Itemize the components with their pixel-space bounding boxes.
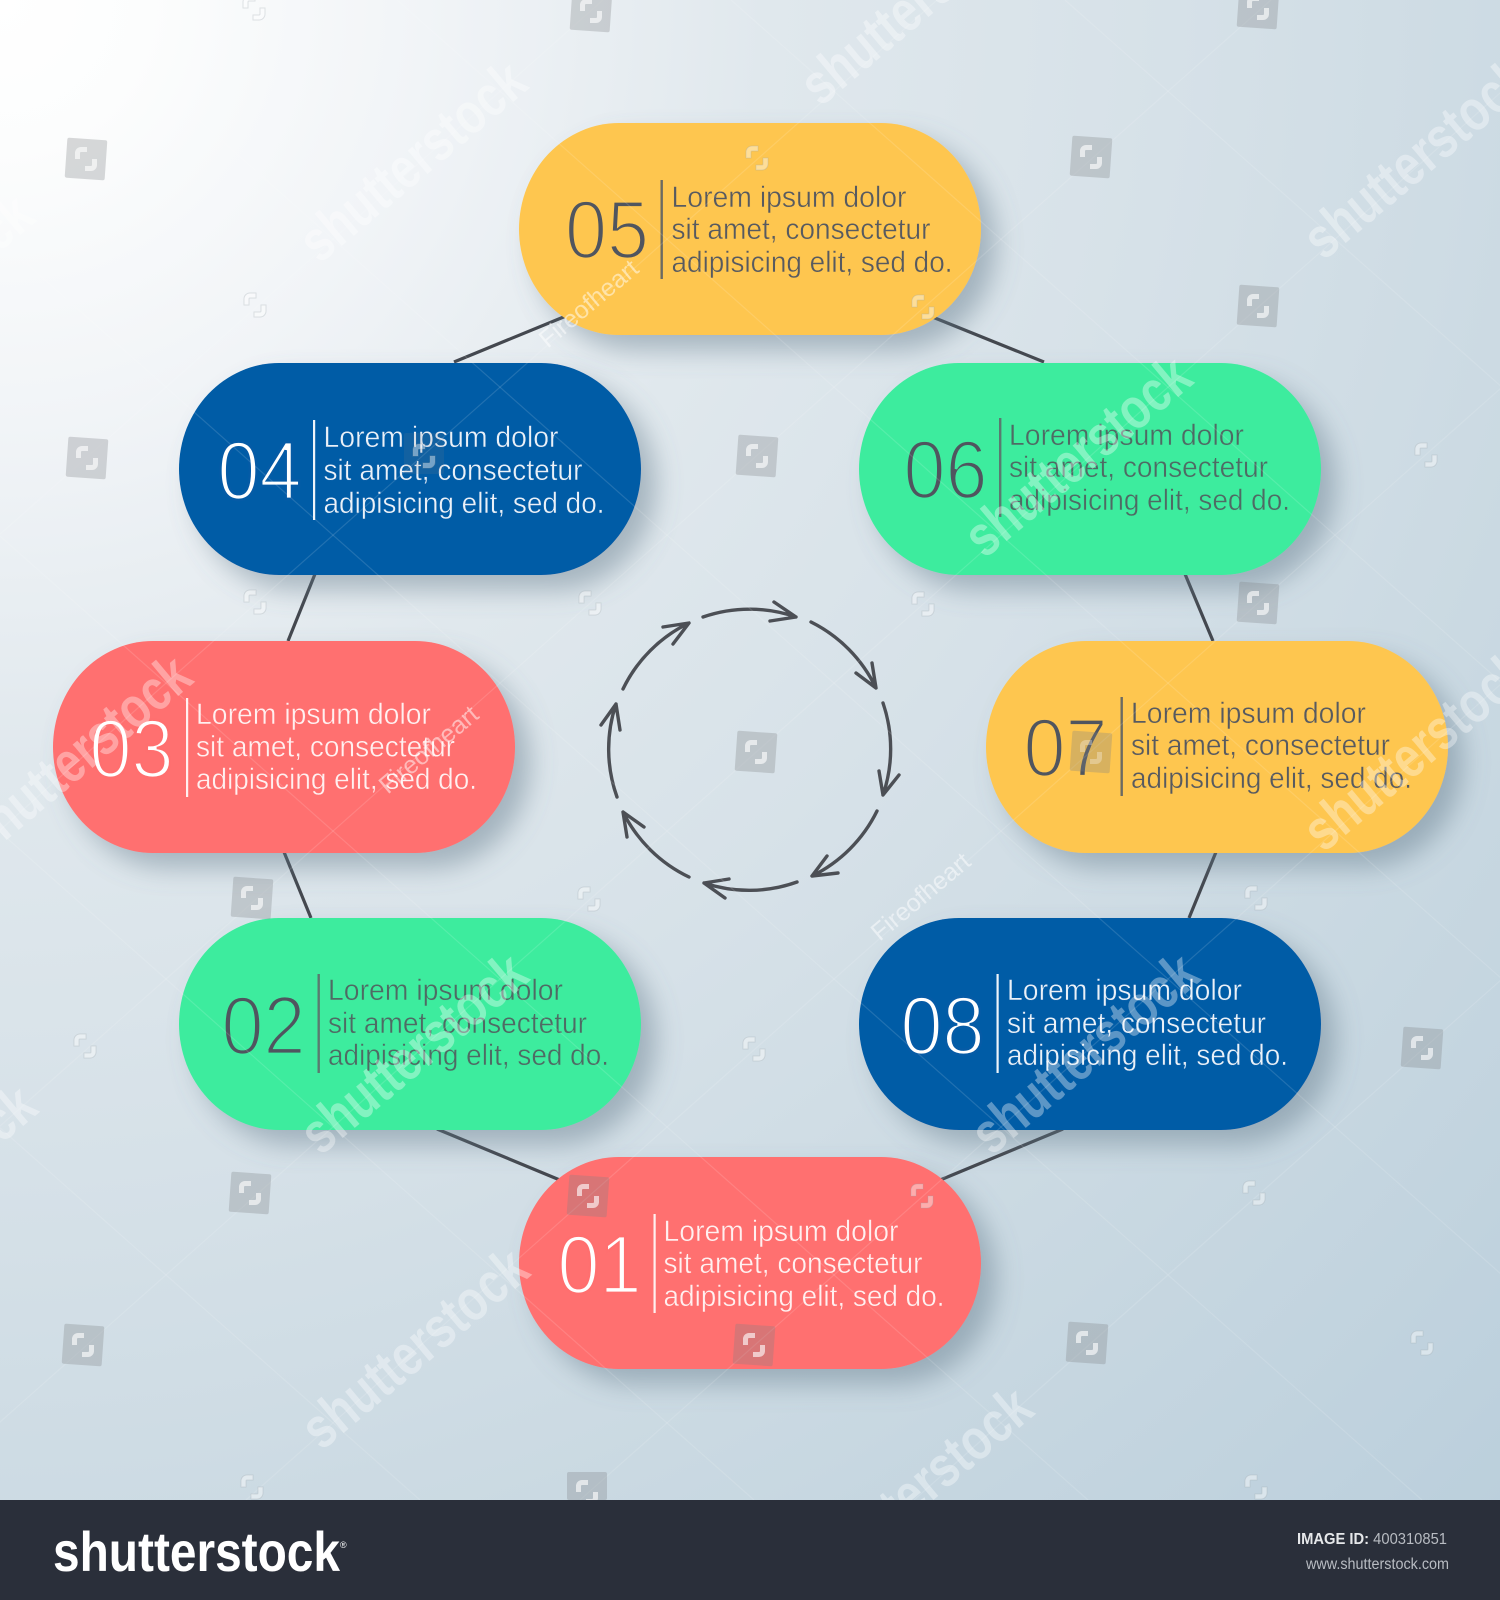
- watermark shutterstock text: shutterstock: [792, 1373, 1045, 1600]
- pill 04: [179, 363, 641, 575]
- pill 06: Lorem ipsum dolor: [1009, 419, 1244, 452]
- pill 08: sit amet, consectetur: [1007, 1007, 1266, 1040]
- pill 02: sit amet, consectetur: [328, 1007, 587, 1040]
- pill 05: 05: [565, 183, 649, 276]
- pill 06: [859, 363, 1321, 575]
- watermark shutterstock text: shutterstock: [951, 342, 1204, 569]
- pill 02: Lorem ipsum dolor: [328, 974, 563, 1007]
- pill 07: 07: [1024, 701, 1108, 794]
- pill 01: 01: [558, 1218, 642, 1311]
- pill 04: 04: [218, 424, 302, 517]
- pill 07: adipisicing elit, sed do.: [1131, 762, 1412, 795]
- pill 06: sit amet, consectetur: [1009, 451, 1268, 484]
- watermark shutterstock text: shutterstock: [286, 47, 539, 274]
- pill 02: 02: [222, 979, 306, 1072]
- pill 07: sit amet, consectetur: [1131, 729, 1390, 762]
- pill 04: sit amet, consectetur: [324, 454, 582, 487]
- pill 01: Lorem ipsum dolor: [664, 1215, 899, 1248]
- footer logo: shutterstock: [53, 1520, 341, 1583]
- pill 08: adipisicing elit, sed do.: [1007, 1039, 1288, 1072]
- pill 01: sit amet, consectetur: [664, 1247, 922, 1280]
- pill 07: [986, 641, 1448, 853]
- watermark contributor name: Fireofheart: [374, 700, 484, 799]
- pill 07: Lorem ipsum dolor: [1131, 697, 1366, 730]
- watermark contributor name: Fireofheart: [534, 254, 644, 353]
- pill 08: Lorem ipsum dolor: [1007, 974, 1242, 1007]
- watermark shutterstock text: shutterstock: [288, 1234, 541, 1461]
- pill 03: adipisicing elit, sed do.: [196, 763, 477, 796]
- watermark shutterstock text: shutterstock: [958, 939, 1211, 1166]
- pill 04: adipisicing elit, sed do.: [324, 487, 604, 520]
- pill 06: adipisicing elit, sed do.: [1009, 484, 1290, 517]
- pill 02: [179, 918, 641, 1130]
- connector lines: [284, 316, 1216, 1183]
- image id: IMAGE ID: 400310851: [1297, 1531, 1447, 1548]
- pill 01: [519, 1157, 981, 1369]
- pill 05: [519, 123, 981, 335]
- pill 03: sit amet, consectetur: [196, 730, 455, 764]
- pill 03: Lorem ipsum dolor: [196, 698, 431, 731]
- pill 06: 06: [904, 423, 988, 516]
- pill 02: adipisicing elit, sed do.: [328, 1039, 609, 1072]
- website: www.shutterstock.com: [1305, 1556, 1449, 1573]
- pill 08: 08: [900, 979, 984, 1072]
- pill 05: adipisicing elit, sed do.: [672, 246, 952, 279]
- watermark contributor name: [374, 254, 976, 946]
- pill 03: [53, 641, 515, 853]
- pill 01: adipisicing elit, sed do.: [664, 1280, 944, 1313]
- pill 05: sit amet, consectetur: [672, 213, 930, 246]
- pill 03: 03: [90, 702, 174, 795]
- footer bar: [0, 1500, 1500, 1600]
- pill 04: Lorem ipsum dolor: [324, 421, 559, 454]
- pill 08: [859, 918, 1321, 1130]
- circular arrows: [601, 602, 899, 898]
- watermark contributor name: Fireofheart: [866, 847, 976, 946]
- pill 05: Lorem ipsum dolor: [672, 181, 907, 214]
- watermark shutterstock text: shutterstock: [287, 939, 540, 1166]
- footer logo: ®: [340, 1540, 347, 1550]
